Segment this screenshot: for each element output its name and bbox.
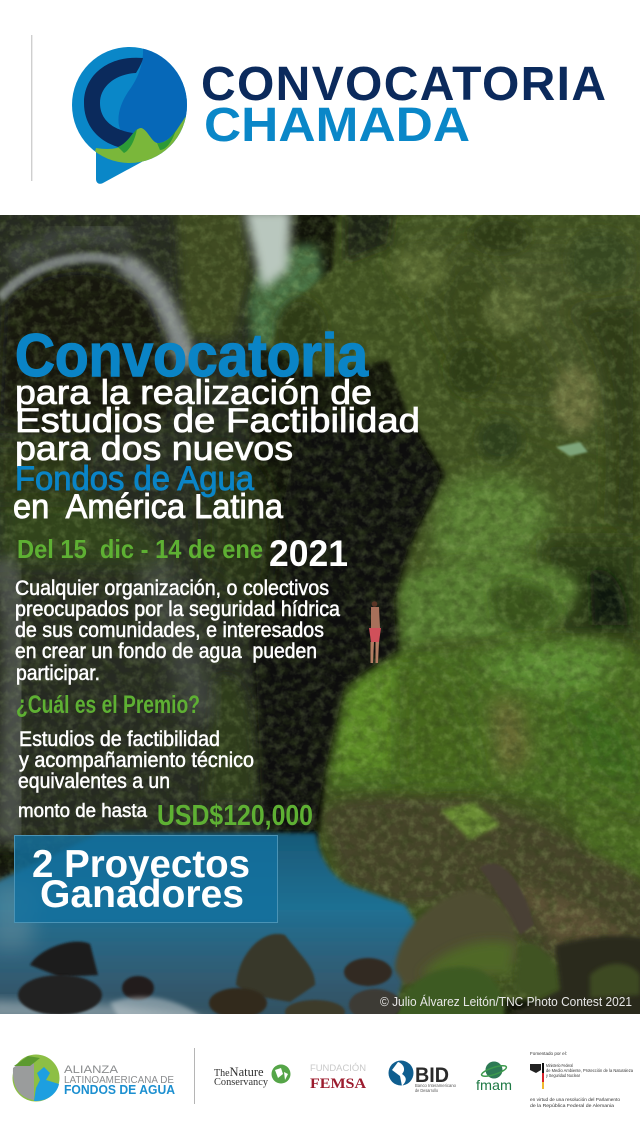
brown rock base (322, 797, 640, 960)
distant moss (248, 244, 330, 350)
logo: BID: de Desarrollo (415, 1088, 438, 1093)
logo: German Federal Ministry funding note: en virtud de una resolución del Parlamento (530, 1097, 620, 1103)
logo wordmark: CONVOCATORIA (201, 58, 606, 111)
climber figure (369, 601, 381, 663)
left rock wall (0, 205, 270, 850)
upper bulge at climber (397, 559, 578, 650)
eligibility paragraph: participar. (16, 662, 100, 685)
prize description (18, 728, 254, 822)
logo: BID: Banco Interamericano (415, 1083, 456, 1088)
eligibility paragraph: preocupados por la seguridad hídrica (15, 598, 340, 621)
header: white background (0, 0, 640, 215)
fern leaves (556, 442, 588, 456)
bright moss lower cliff (326, 636, 640, 820)
subtitle block: para la realización de (15, 374, 372, 412)
logo: Fundación FEMSA: FUNDACIÓN (310, 1063, 366, 1073)
prize description: Estudios de factibilidad (19, 728, 220, 751)
header divider line (31, 35, 32, 181)
logo: The Nature Conservancy: Conservancy (214, 1077, 269, 1088)
callout: 2 proyectos ganadores: Ganadores (40, 873, 244, 916)
dates: Del 15 dic - 14 de ene (17, 534, 263, 564)
callout: 2 proyectos ganadores (14, 836, 278, 922)
logo: German Federal Ministry funding note: Fomentado por el: (530, 1051, 567, 1057)
logo: German Federal Ministry funding note: Ministerio Federal (546, 1063, 573, 1069)
logo: Fundación FEMSA (310, 1063, 366, 1092)
subtitle block: para dos nuevos (15, 430, 293, 468)
eligibility paragraph: de sus comunidades, e interesados (15, 619, 324, 642)
logo: fmam (476, 1062, 512, 1093)
title: Convocatoria: Convocatoria (15, 322, 369, 389)
logo: The Nature Conservancy: TheNature (214, 1065, 264, 1079)
logo: Alianza icon (12, 1054, 60, 1102)
logo text: Alianza Latinoamericana de Fondos de Agua: FONDOS DE AGUA (64, 1083, 175, 1097)
texture: moss and rock grain (0, 215, 640, 1014)
logo: The Nature Conservancy (214, 1064, 290, 1088)
logo text: Alianza Latinoamericana de Fondos de Agua (64, 1064, 175, 1097)
prize heading: ¿Cuál es el Premio? (16, 691, 200, 719)
sky gap (244, 210, 292, 290)
footer background (0, 1014, 640, 1138)
waterfall streams (0, 258, 120, 298)
prize description: monto de hasta (18, 801, 147, 822)
logo: German Federal Ministry funding note: y Seguridad Nuclear (546, 1073, 580, 1079)
logo: German Federal Ministry funding note: de la República Federal de Alemania (530, 1103, 614, 1109)
logo wordmark (201, 58, 606, 152)
eligibility paragraph (15, 577, 340, 685)
logo wordmark: CHAMADA (204, 99, 470, 152)
logo: German Federal Ministry funding note (530, 1051, 633, 1109)
callout: 2 proyectos ganadores: 2 Proyectos (32, 843, 250, 886)
waterfall rock dome (0, 272, 172, 440)
subtitle block: en América Latina (13, 488, 283, 526)
prize amount: USD$120,000 (157, 800, 313, 832)
logo text: Alianza Latinoamericana de Fondos de Agua: LATINOAMERICANA DE (64, 1074, 174, 1086)
prize description: y acompañamiento técnico (19, 749, 254, 772)
eligibility paragraph: Cualquier organización, o colectivos (15, 577, 329, 600)
boulders (480, 864, 534, 935)
dark cave (255, 412, 442, 830)
moss blotches on upper cliff (275, 217, 632, 462)
logo text: Alianza Latinoamericana de Fondos de Agua: ALIANZA (64, 1064, 119, 1076)
dates: 2021 (269, 533, 348, 574)
eligibility paragraph: en crear un fondo de agua pueden (15, 640, 317, 663)
subtitle block: Fondos de Agua (15, 460, 254, 498)
prize description: equivalentes a un (18, 770, 170, 793)
photo: mossy canyon with waterfall and river (0, 205, 640, 1024)
logo: fmam: fmam (476, 1077, 512, 1093)
footer divider (194, 1048, 195, 1104)
subtitle block (13, 374, 420, 526)
river water (0, 833, 420, 1020)
icon: convocatoria speech bubble logo (70, 45, 190, 184)
logo: BID: BID (415, 1064, 449, 1087)
main cliff (270, 205, 640, 1000)
logo: Fundación FEMSA: FEMSA (310, 1076, 366, 1092)
dates (17, 533, 348, 574)
subtitle block: Estudios de Factibilidad (15, 402, 420, 440)
logo: BID (388, 1060, 456, 1093)
